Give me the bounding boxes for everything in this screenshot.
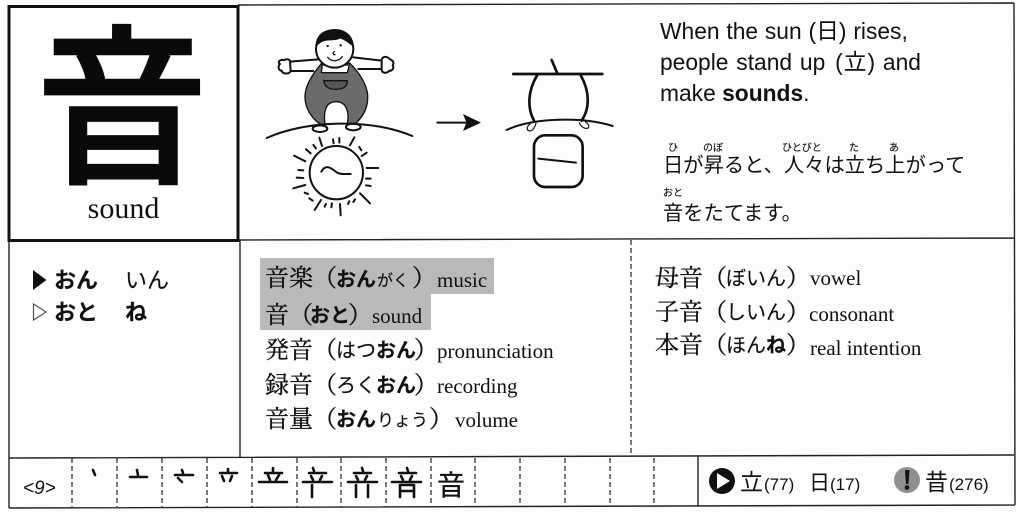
word: music: music	[437, 268, 487, 292]
kun reading: ね	[125, 295, 147, 327]
text block: Japanese explanation with furigana: 日が昇ると、人々は立ち上がって	[663, 154, 965, 177]
panel: other vocabulary	[655, 258, 922, 360]
word: volume: 音量（	[265, 399, 337, 434]
panel: main kanji	[9, 0, 238, 240]
word: sound: おと	[310, 299, 350, 328]
word: real intention: 本音（	[655, 325, 727, 360]
word: pronunciation: pronunciation	[437, 339, 554, 363]
highlight: key vocabulary background	[260, 258, 494, 330]
word: consonant: 子音（	[655, 292, 727, 327]
text block: English explanation: When the sun (日) rises,	[660, 18, 908, 44]
word: recording: recording	[437, 374, 518, 398]
text block: Japanese explanation with furigana: ひとびと	[782, 139, 822, 154]
text block: Japanese explanation with furigana: あ	[889, 139, 899, 154]
text block: English explanation	[660, 18, 921, 106]
text block: English explanation: make sounds.	[660, 80, 810, 106]
arrow	[437, 114, 481, 131]
icon: components play mark	[709, 468, 735, 494]
word: recording: 録音（	[265, 365, 337, 400]
word: music	[265, 258, 487, 293]
word: pronunciation: 発音（	[265, 330, 337, 365]
word: real intention: ほんね	[726, 329, 786, 358]
word: real intention: real intention	[810, 336, 922, 360]
text block: Japanese explanation with furigana: 音をたてます。	[663, 202, 802, 225]
word: sound: ）	[348, 295, 372, 330]
word: volume: おんりょう	[336, 403, 428, 432]
word: real intention	[655, 325, 922, 360]
word: pronunciation	[265, 330, 554, 365]
word: consonant	[655, 292, 894, 327]
reference: 昔: 昔(276)	[925, 469, 989, 495]
stroke count: <9>	[23, 478, 56, 499]
word: recording: ）	[414, 365, 438, 400]
icon: caution mark	[894, 467, 920, 493]
word: consonant: consonant	[809, 302, 894, 326]
word: vowel: 母音（	[655, 258, 727, 293]
word: consonant: しいん	[726, 296, 786, 325]
stroke order diagram	[93, 468, 421, 497]
word: sound	[265, 295, 423, 330]
word: real intention: ）	[786, 325, 810, 360]
word: pronunciation: ）	[414, 330, 438, 365]
word: consonant: ）	[786, 292, 810, 327]
word: vowel: ）	[786, 258, 810, 293]
word: music: 音楽（	[265, 258, 337, 293]
on reading: いん	[125, 263, 169, 295]
text block: Japanese explanation with furigana: のぼ	[703, 139, 723, 154]
word: sound: sound	[372, 304, 423, 328]
icon: abstracted kanji strokes	[507, 60, 613, 187]
reference: 立: 立(77)	[740, 469, 794, 495]
kanji meaning: sound	[88, 192, 159, 225]
panel: kanji origin illustration	[267, 30, 613, 215]
icon: outline triangle	[34, 304, 46, 320]
text block: English explanation: people stand up (立) and	[660, 49, 921, 75]
word: sound: 音（	[265, 295, 313, 330]
panel: readings	[33, 263, 169, 327]
final kanji in stroke order: 音	[437, 464, 465, 504]
word: music: おんがく	[336, 263, 409, 292]
word: music: ）	[412, 258, 436, 293]
word: volume	[265, 399, 518, 434]
word: recording: ろくおん	[336, 369, 416, 398]
reference: 日: 日(17)	[809, 472, 860, 495]
kun reading: おと	[54, 295, 98, 327]
panel: vocabulary list	[265, 258, 554, 434]
text block: Japanese explanation with furigana: ひ	[668, 139, 678, 154]
word: vowel: ぼいん	[726, 262, 786, 291]
text block: Japanese explanation with furigana	[663, 139, 965, 225]
icon: rising sun	[293, 137, 378, 215]
on reading: おん	[54, 263, 98, 295]
word: recording	[265, 365, 518, 400]
text block: Japanese explanation with furigana: た	[849, 139, 859, 154]
text block: Japanese explanation with furigana: おと	[663, 184, 683, 199]
word: volume: volume	[455, 408, 518, 432]
icon: solid triangle	[33, 270, 46, 290]
word: vowel	[655, 258, 861, 293]
icon: man standing on horizon	[267, 30, 412, 138]
word: volume: ）	[429, 399, 453, 434]
word: vowel: vowel	[810, 266, 861, 290]
word: pronunciation: はつおん	[336, 334, 416, 363]
panel: related kanji references	[709, 467, 989, 495]
